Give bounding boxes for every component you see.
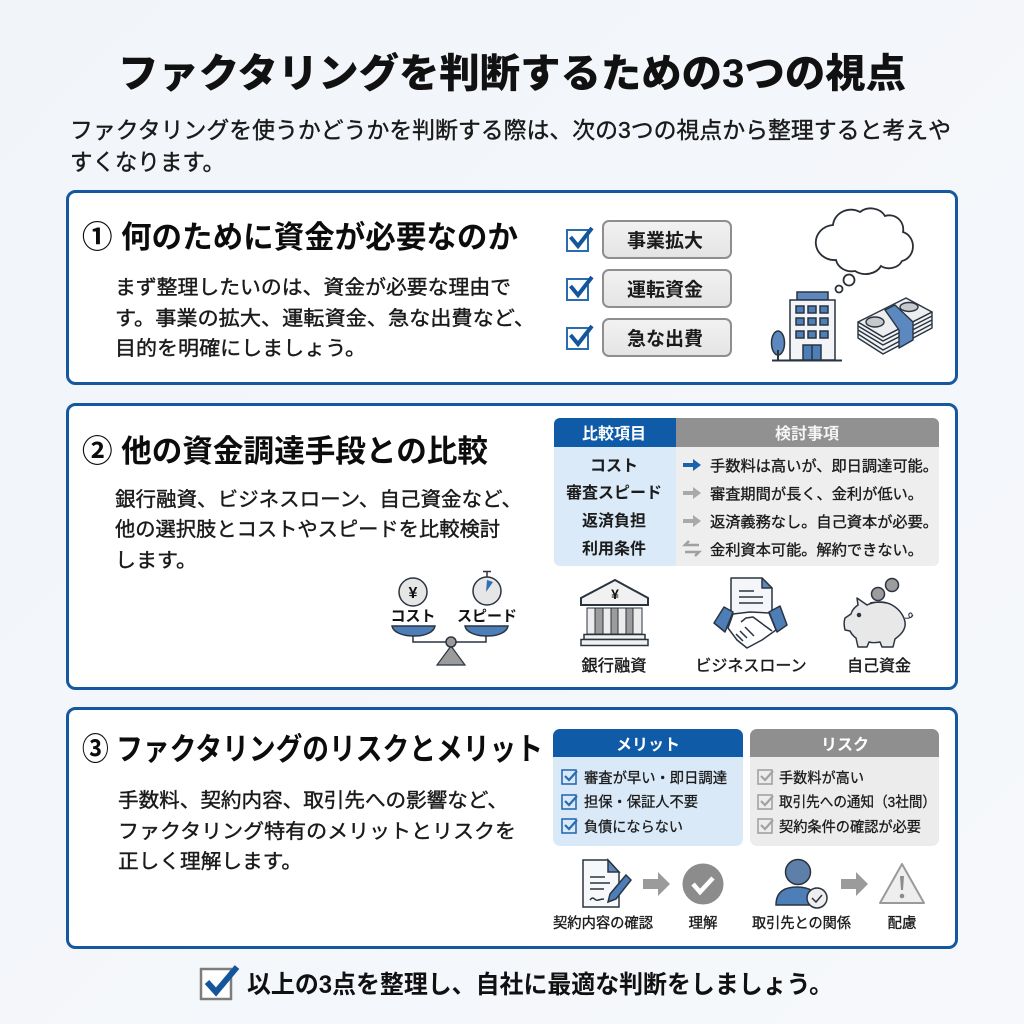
- row: repayment burden: 返済負担: [582, 511, 646, 530]
- row: terms of use: 利用条件: [582, 539, 646, 558]
- body text 2: [115, 488, 522, 572]
- row: cost: [590, 458, 938, 475]
- icon: bank: [581, 580, 648, 646]
- body text 1: 目的を明確にしましょう。: [115, 337, 366, 360]
- icon: stack of banknotes: [858, 298, 932, 354]
- risk list: [758, 770, 773, 833]
- icon: stopwatch: [473, 572, 501, 605]
- intro text: すくなります。: [70, 149, 225, 175]
- panel 1: purpose of funds: [68, 192, 956, 384]
- merit card: [553, 729, 743, 846]
- body text 2: します。: [115, 550, 197, 572]
- body text 1: す。事業の拡大、運転資金、急な出費など、: [115, 307, 535, 330]
- body text 3: 手数料、契約内容、取引先への影響など、: [118, 789, 508, 812]
- merit card: 審査が早い・即日調達: [584, 770, 727, 787]
- label: understanding: 理解: [688, 915, 718, 932]
- checklist: purposes: [567, 221, 731, 356]
- label: bank loan: 銀行融資: [582, 657, 646, 675]
- risk card: リスク: [821, 736, 869, 754]
- icon: building with tree: [772, 292, 842, 360]
- heading 1: ① 何のために資金が必要なのか: [82, 220, 518, 255]
- icon: person with check: [776, 860, 827, 908]
- icon: warning triangle: [880, 864, 924, 903]
- label: consideration: 配慮: [888, 915, 916, 932]
- risk card: 手数料が高い: [779, 770, 864, 787]
- row: cost: コスト: [590, 458, 638, 475]
- icon: bank: ¥: [611, 586, 619, 602]
- row: terms of use: 金利資本可能。解約できない。: [710, 542, 923, 559]
- body text 3: ファクタリング特有のメリットとリスクを: [118, 820, 516, 843]
- risk card: 契約条件の確認が必要: [779, 819, 921, 836]
- label: client relationship: 取引先との関係: [752, 915, 851, 932]
- row: terms of use: [582, 539, 923, 559]
- panel 3: risks and merits: [68, 708, 956, 948]
- body text 3: 正しく理解します。: [118, 850, 302, 873]
- item: sudden expense: [567, 319, 731, 356]
- label: own funds: 自己資金: [847, 657, 911, 675]
- title: ファクタリングを判断するための3つの視点: [118, 51, 906, 96]
- item: working capital: [567, 270, 731, 307]
- row: screening speed: 審査期間が長く、金利が低い。: [710, 486, 923, 503]
- item: working capital: 運転資金: [627, 279, 703, 301]
- heading 2: ② 他の資金調達手段との比較: [82, 434, 488, 469]
- scale label: speed: スピード: [457, 608, 517, 625]
- body text 1: [115, 276, 535, 360]
- body text 1: まず整理したいのは、資金が必要な理由で: [115, 276, 511, 299]
- item: business expansion: 事業拡大: [627, 230, 703, 252]
- icon: thought bubble: [816, 208, 913, 292]
- intro text: ファクタリングを使うかどうかを判断する際は、次の3つの視点から整理すると考えや: [70, 117, 951, 143]
- row: repayment burden: 返済義務なし。自己資本が必要。: [710, 514, 938, 531]
- table header: [582, 424, 839, 443]
- merit list: [562, 770, 577, 833]
- row: screening speed: [566, 484, 923, 503]
- body text 3: [118, 789, 516, 873]
- scale label: cost: コスト: [390, 608, 436, 625]
- icon: balance scale cost vs speed: [390, 572, 517, 665]
- icon: gray check circle: [682, 864, 724, 904]
- icon: piggy bank: [844, 578, 913, 647]
- item: business expansion: [567, 221, 731, 258]
- row: cost: 手数料は高いが、即日調達可能。: [710, 458, 938, 475]
- row: screening speed: 審査スピード: [566, 484, 662, 502]
- body text 2: 他の選択肢とコストやスピードを比較検討: [115, 518, 500, 541]
- row: repayment burden: [582, 511, 938, 531]
- arrow: contract to understanding: [643, 872, 670, 896]
- merit card: 負債にならない: [584, 819, 683, 836]
- risk card: [750, 729, 939, 846]
- heading 3: ③ ファクタリングのリスクとメリット: [82, 732, 543, 767]
- intro text: [70, 117, 951, 175]
- icon: document and handshake: [714, 578, 787, 648]
- conclusion with check icon: 以上の3点を整理し、自社に最適な判断をしましょう。: [247, 971, 833, 999]
- table header: 比較項目: [582, 425, 646, 443]
- icon: large checkbox: [201, 967, 237, 999]
- merit card: 担保・保証人不要: [584, 794, 698, 811]
- body text 2: 銀行融資、ビジネスローン、自己資金など、: [115, 488, 522, 511]
- item: sudden expense: 急な出費: [627, 327, 703, 350]
- comparison table: [554, 418, 939, 566]
- risk card: 取引先への通知（3社間）: [779, 794, 936, 811]
- panel 2: comparison with other funding: [68, 404, 956, 688]
- icon: yen coin: ¥: [409, 585, 418, 602]
- label: contract check: 契約内容の確認: [553, 915, 653, 932]
- merit card: メリット: [616, 737, 680, 754]
- table header: 検討事項: [775, 424, 839, 443]
- icon: contract with pen: [583, 860, 631, 907]
- label: business loan: ビジネスローン: [695, 657, 807, 675]
- arrow: relationship to consideration: [841, 872, 868, 896]
